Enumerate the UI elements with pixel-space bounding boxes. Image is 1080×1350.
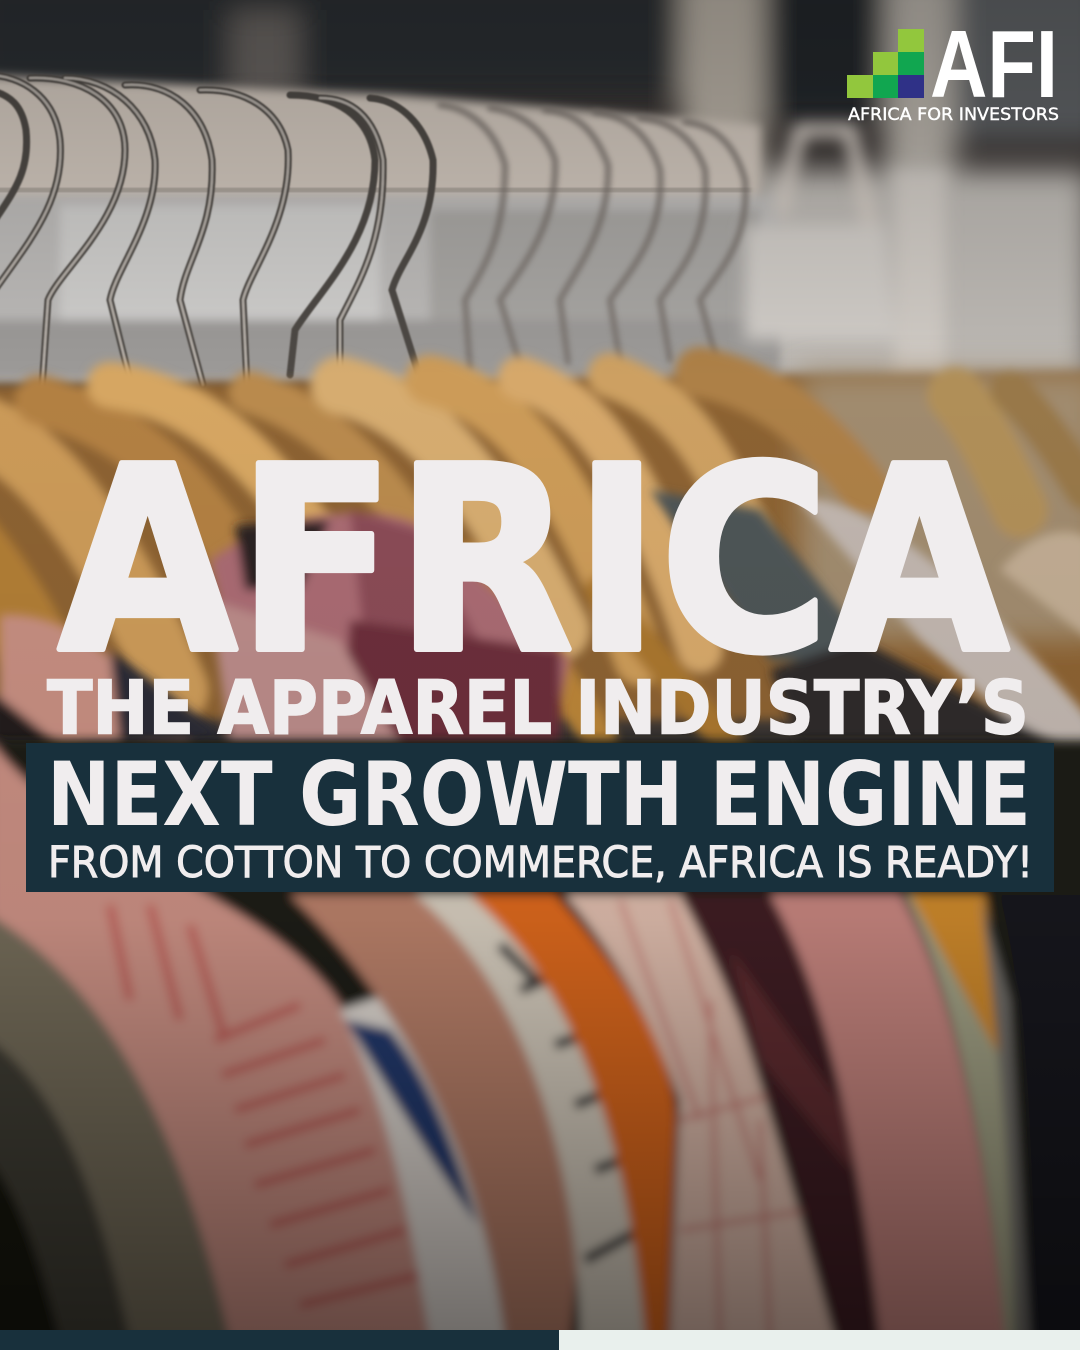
- striped white and black shirt: [415, 895, 650, 1340]
- garments behind the hangers: [0, 75, 780, 385]
- green floral shirt: [905, 895, 1015, 1340]
- wire hooks, front: [0, 75, 433, 388]
- olive sleeve: [0, 915, 230, 1340]
- wire hooks, rear: [440, 105, 746, 368]
- logo: AFI: [847, 11, 1059, 125]
- salmon pink jumper: [770, 895, 1005, 1340]
- orange shirt: [470, 895, 675, 1340]
- icon: stepped green squares: [847, 29, 924, 98]
- footer bar: dark segment: [0, 1330, 559, 1350]
- white and navy shirt: [340, 990, 510, 1340]
- salmon shirt: [290, 895, 580, 1340]
- lower garments: [0, 740, 1080, 1350]
- headline band: [26, 743, 1054, 892]
- headline: AFRICA: AFRICA: [58, 413, 1009, 710]
- pink stripe shirt: [0, 740, 450, 1340]
- logo tagline: AFRICA FOR INVESTORS: [848, 105, 1059, 125]
- dark garment at right: [1000, 895, 1080, 1340]
- dark plaid shirt: [680, 895, 880, 1340]
- footer bar: light segment: [559, 1330, 1080, 1350]
- store backdrop: [0, 0, 1080, 450]
- background bag: [745, 130, 945, 460]
- plaid white and pink shirt: [565, 895, 835, 1340]
- wooden hangers: [0, 370, 1080, 760]
- mid-rack folded garments: [0, 490, 1080, 790]
